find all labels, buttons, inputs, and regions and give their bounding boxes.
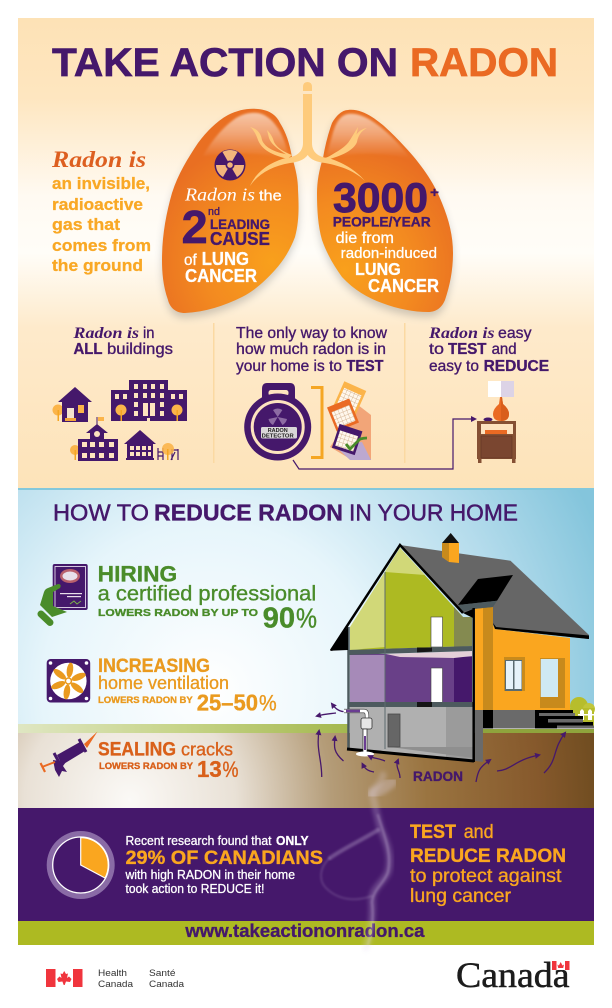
text: second leading cause of lung cancer: nd xyxy=(208,206,220,218)
icon: calendars xyxy=(327,381,371,460)
icon: radon detector xyxy=(244,383,311,460)
text: test and reduce radon: TEST xyxy=(410,822,456,843)
text: hiring a certified professional: 90 xyxy=(263,602,295,634)
text: 3000+ people per year: PEOPLE/YEAR xyxy=(333,214,431,230)
office building xyxy=(111,380,187,421)
icon: buildings xyxy=(52,380,187,461)
text: only way to know: your home is to xyxy=(236,358,342,375)
structure xyxy=(330,545,483,762)
arrow: detector to nightstand xyxy=(293,419,475,469)
text: only way to know: TEST xyxy=(346,358,384,375)
dormer xyxy=(458,575,513,612)
text: test and reduce radon: lung cancer xyxy=(410,886,512,907)
orange wing xyxy=(475,608,570,710)
text: hiring a certified professional xyxy=(98,562,317,634)
title: RADON xyxy=(410,41,558,85)
library and playground xyxy=(124,430,178,460)
text: hiring a certified professional: % xyxy=(296,602,317,634)
text: second leading cause of lung cancer: Radon is xyxy=(184,185,255,205)
grass xyxy=(18,724,348,734)
illustration: lungs xyxy=(162,82,453,313)
text: increasing home ventilation: home ventilation xyxy=(98,673,229,693)
house xyxy=(52,387,92,422)
text: only way to know xyxy=(236,325,388,375)
text: easy to test and reduce: easy xyxy=(498,325,532,342)
icon: radiation symbol xyxy=(214,150,246,180)
text: 29 percent of canadians: with high RADON in their home xyxy=(125,867,295,882)
top floor xyxy=(350,548,472,650)
text: sealing cracks: SEALING xyxy=(98,740,176,760)
text: easy to test and reduce: easy to xyxy=(429,358,479,375)
panel: statistics band xyxy=(18,808,594,921)
logo: health canada: Canada xyxy=(98,979,133,989)
bushes and fence xyxy=(570,697,595,726)
text: sealing cracks xyxy=(98,740,238,782)
text: sealing cracks: 13 xyxy=(197,756,222,782)
text: test and reduce radon xyxy=(410,822,566,907)
logo: canada wordmark: Canada xyxy=(456,955,570,995)
icon: ventilation fan xyxy=(47,659,90,702)
logo: health canada: Canada xyxy=(149,979,184,989)
text: 29 percent of canadians xyxy=(125,833,323,896)
logo: health canada: Health xyxy=(98,968,127,978)
pie chart: 29 percent xyxy=(47,831,115,899)
text: hiring a certified professional: a certified professional xyxy=(98,582,316,606)
url: www.takeactiononradon.ca xyxy=(184,921,425,941)
icon: lamp and nightstand xyxy=(477,381,516,463)
text: second leading cause of lung cancer: of xyxy=(184,252,197,269)
chimney xyxy=(442,533,459,563)
text: sealing cracks: LOWERS RADON BY xyxy=(99,761,194,772)
text: easy to test and reduce: and xyxy=(492,341,517,358)
trachea and bronchi xyxy=(250,82,367,186)
text: second leading cause of lung cancer: the xyxy=(259,188,282,205)
text: 3000+ people per year: LUNG xyxy=(355,259,401,279)
label: radon: RADON xyxy=(413,769,463,784)
text block: radon is an invisible gas: gas that xyxy=(52,215,120,234)
text: second leading cause of lung cancer: 2 xyxy=(182,201,208,253)
text: 29 percent of canadians: ONLY xyxy=(276,833,309,848)
text: 3000+ people per year: + xyxy=(430,184,439,200)
text: radon is in all buildings: buildings xyxy=(107,341,173,358)
middle floor xyxy=(350,651,472,703)
heading: how to reduce radon: HOW TO xyxy=(53,500,149,526)
text: 3000+ people per year: CANCER xyxy=(368,276,439,296)
text: only way to know: how much radon is in xyxy=(236,341,386,358)
text: 3000+ people per year: 3000 xyxy=(333,174,428,221)
text: sealing cracks: % xyxy=(222,757,238,782)
text: easy to test and reduce: REDUCE xyxy=(484,358,549,375)
text: only way to know: The only way to know xyxy=(236,325,388,342)
text: 29 percent of canadians: 29% OF CANADIANS xyxy=(126,848,323,869)
heading: how to reduce radon: REDUCE RADON xyxy=(154,500,343,526)
ground xyxy=(18,733,594,808)
main roof xyxy=(400,545,589,639)
text: easy to test and reduce: Radon is xyxy=(428,325,494,342)
bracket xyxy=(311,388,322,458)
text: 3000+ people per year: die from xyxy=(336,230,394,247)
text: 29 percent of canadians: took action to REDUCE it! xyxy=(126,881,264,896)
text: hiring a certified professional: LOWERS RADON BY UP TO xyxy=(98,607,258,619)
text block: radon is an invisible gas: the ground xyxy=(52,256,143,275)
text block: radon is an invisible gas: an invisible, xyxy=(52,174,150,193)
smoke xyxy=(321,775,392,948)
text: sealing cracks: cracks xyxy=(181,740,233,760)
icon: radon detector: DETECTOR xyxy=(262,434,294,440)
text: easy to test and reduce: to xyxy=(429,341,444,358)
text: second leading cause of lung cancer: CANCER xyxy=(185,266,257,286)
left lung xyxy=(162,109,299,313)
text: 3000+ people per year: radon-induced xyxy=(341,246,437,262)
text: 3000+ people per year xyxy=(333,174,439,296)
text: increasing home ventilation xyxy=(98,656,277,716)
text: second leading cause of lung cancer: LUNG xyxy=(202,249,249,269)
text: radon is in all buildings: ALL xyxy=(74,341,102,358)
text: radon is in all buildings xyxy=(72,325,173,358)
title: TAKE ACTION ON xyxy=(52,41,398,85)
text: increasing home ventilation: INCREASING xyxy=(98,656,210,677)
text: increasing home ventilation: LOWERS RADON BY xyxy=(98,695,193,706)
school xyxy=(70,417,118,461)
text: hiring a certified professional: HIRING xyxy=(98,562,177,586)
text: easy to test and reduce xyxy=(428,325,549,375)
text: radon is in all buildings: in xyxy=(143,325,154,342)
flag xyxy=(46,969,82,987)
text block: radon is an invisible gas: Radon is xyxy=(51,147,146,172)
logo: health canada: Santé xyxy=(149,968,176,978)
text: test and reduce radon: to protect against xyxy=(410,866,562,887)
panel: how to reduce background xyxy=(18,488,594,728)
window xyxy=(504,657,525,691)
text block: radon is an invisible gas xyxy=(51,147,151,275)
porch xyxy=(540,658,565,708)
lung shadows xyxy=(162,114,453,318)
text: radon is in all buildings: Radon is xyxy=(72,325,139,342)
text: easy to test and reduce: TEST xyxy=(448,341,487,358)
illustration: house cutaway xyxy=(330,533,595,762)
text block: radon is an invisible gas: comes from xyxy=(52,236,151,255)
right lung xyxy=(317,110,453,312)
logo: health canada xyxy=(46,968,184,989)
text: 29 percent of canadians: Recent research found that xyxy=(126,833,272,848)
icon: certificate and hand xyxy=(40,564,88,622)
title xyxy=(52,41,558,85)
url band xyxy=(18,921,594,945)
text: test and reduce radon: and xyxy=(464,822,494,843)
basement xyxy=(350,707,473,760)
text: increasing home ventilation: 25–50 xyxy=(197,690,258,716)
icon: caulk gun xyxy=(40,732,98,777)
text: test and reduce radon: REDUCE RADON xyxy=(410,845,566,867)
steps xyxy=(535,710,594,728)
text: increasing home ventilation: % xyxy=(259,690,277,716)
heading: how to reduce radon: IN YOUR HOME xyxy=(349,500,518,526)
text: second leading cause of lung cancer xyxy=(182,185,282,286)
radon vent pipe xyxy=(344,711,374,756)
icon: radon detector: RADON xyxy=(268,428,288,434)
text: second leading cause of lung cancer: LEADING xyxy=(210,216,270,232)
heading: how to reduce radon xyxy=(53,500,518,526)
panel: take action background xyxy=(18,18,594,488)
text block: radon is an invisible gas: radioactive xyxy=(52,195,143,214)
text: second leading cause of lung cancer: CAUSE xyxy=(210,229,270,249)
radon arrows xyxy=(317,704,565,782)
